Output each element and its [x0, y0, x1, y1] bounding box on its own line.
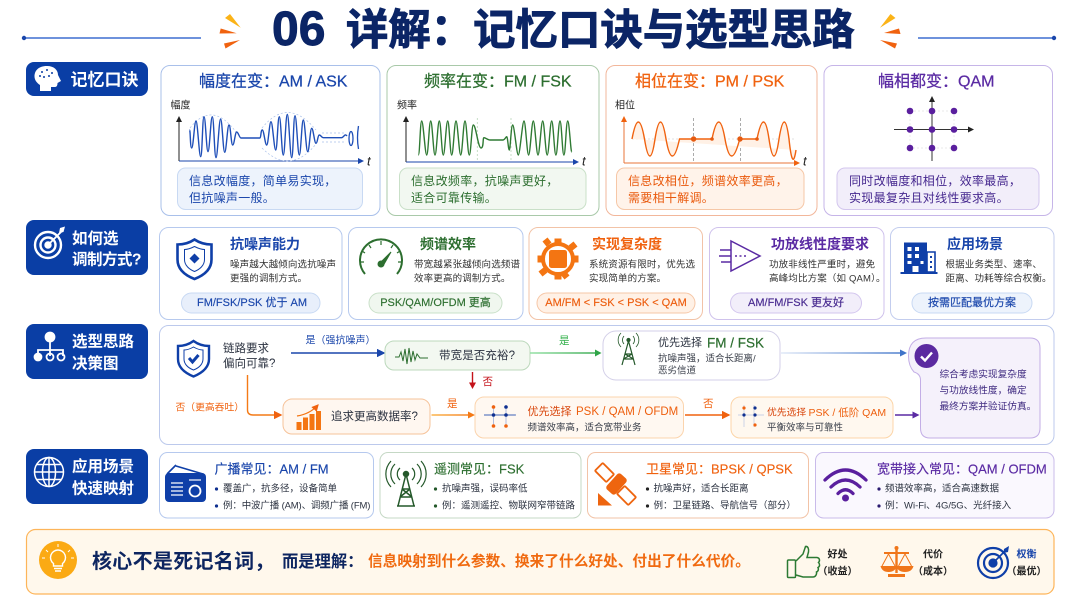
pill: FM/FSK/PSK 优于 AM [197, 296, 307, 309]
box heading: 优先选择 [767, 406, 806, 418]
box heading: 优先选择 [658, 335, 702, 349]
card title: 幅相都变：QAM [878, 72, 994, 90]
chart: amplitude modulation: 幅度 [170, 98, 190, 112]
icon: target [978, 546, 1009, 578]
box heading [658, 335, 764, 350]
pill: PSK/QAM/OFDM 更高 [380, 295, 491, 309]
section tag: 应用场景快速映射 [26, 449, 148, 504]
card title: 相位在变：PM / PSK [635, 72, 785, 90]
bullet list [215, 482, 370, 512]
takeaway text: 信息映射到什么参数、换来了什么好处、付出了什么代价。 [368, 552, 750, 570]
icon: thumbs up [788, 546, 820, 578]
box text: 恶劣信道 [658, 364, 697, 376]
decision text [223, 341, 275, 370]
arrow: no higher throughput [248, 375, 281, 415]
header line right [918, 36, 1056, 40]
box: bandwidth question: 带宽是否充裕? [439, 348, 515, 362]
icon: check [914, 344, 938, 368]
panel: telemetry [380, 452, 581, 518]
pill [730, 293, 862, 313]
title: 详解：记忆口诀与选型思路 [346, 6, 855, 54]
arrow: to final purple [895, 412, 920, 418]
tag text: 如何选 [72, 228, 119, 248]
final text [940, 368, 1036, 412]
card title: 宽带接入常见：QAM / OFDM [877, 462, 1047, 476]
chart: phase modulation [615, 98, 808, 168]
tag text: 快速映射 [72, 480, 134, 498]
takeaway text [92, 549, 750, 573]
info box: 实现最复杂且对线性要求高。 [849, 190, 1009, 205]
card title: 频率在变：FM / FSK [424, 72, 572, 90]
icon: globe [34, 458, 64, 486]
box heading: PSK / 低阶 QAM [808, 406, 886, 419]
cost label [913, 548, 953, 578]
section tag: 选型思路决策图 [26, 324, 148, 379]
pill [912, 293, 1032, 313]
bullet list: 例：卫星链路、导航信号（部分） [654, 500, 796, 512]
bullet list [434, 482, 576, 512]
info box: 需要相干解调。 [628, 191, 714, 205]
label: yes strong noise: 是（强抗噪声） [306, 334, 376, 346]
tag text [72, 456, 134, 498]
info box: 同时改幅度和相位，效率最高， [849, 173, 1021, 188]
arrow: no to low order [685, 414, 729, 416]
icon: right sparks [880, 14, 900, 48]
pill: 按需匹配最优方案 [928, 295, 1016, 309]
body text: 实现简单的方案。 [589, 272, 666, 284]
body text [230, 258, 336, 284]
arrow: to bandwidth [291, 352, 384, 354]
chart: phase modulation: 相位 [615, 98, 635, 112]
pill [369, 293, 502, 313]
box: bandwidth question [385, 341, 530, 370]
icon: tower [386, 461, 426, 506]
pill: AM/FM < FSK < PSK < QAM [545, 297, 687, 309]
panel: 应用场景 [890, 228, 1054, 320]
chart: frequency modulation: 频率 [397, 98, 417, 112]
icon: left sparks [220, 14, 241, 48]
info box: 信息改频率，抗噪声更好， [411, 173, 559, 188]
cost label: （成本） [913, 564, 953, 578]
arrow: to final [781, 350, 907, 356]
info box [400, 168, 586, 210]
panel: decision flow [160, 326, 1054, 444]
icon: buildings [900, 242, 938, 274]
pill [182, 293, 320, 313]
heading: 应用场景 [947, 236, 1003, 252]
icon: scale [880, 546, 914, 577]
tag text: 应用场景 [72, 456, 134, 476]
tradeoff label: （最优） [1006, 564, 1046, 578]
body text: 高峰均比方案（如 QAM）。 [769, 272, 886, 284]
tag text [72, 332, 135, 372]
tag text: 决策图 [72, 354, 119, 372]
panel: satellite [588, 452, 808, 518]
body text [414, 258, 521, 284]
benefit label: 好处 [828, 548, 848, 560]
box text: 频谱效率高，适合宽带业务 [528, 422, 642, 434]
body text: 功放非线性严重时，避免 [769, 258, 876, 270]
box text: 抗噪声强，适合长距离/ [658, 352, 756, 364]
info box: 信息改相位，频谱效率更高， [628, 173, 788, 188]
tradeoff label [1006, 548, 1046, 578]
box heading: 优先选择 [528, 404, 572, 418]
takeaway text: 核心不是死记名词， [92, 549, 275, 573]
card title: 遥测常见：FSK [434, 462, 525, 476]
panel: 实现复杂度 [529, 228, 702, 320]
section tag: 记忆口诀 [26, 62, 148, 96]
chart: QAM constellation [894, 97, 973, 161]
card title: 幅度在变：AM / ASK [199, 72, 348, 90]
tag text: 调制方式? [72, 250, 141, 268]
box heading [767, 406, 886, 419]
chart: amplitude modulation [170, 98, 372, 168]
bullet list: 例：中波广播 (AM)、调频广播 (FM) [223, 500, 370, 512]
info box: 适合可靠传输。 [411, 190, 497, 205]
tag text: 记忆口诀 [70, 70, 138, 90]
icon: shield check [178, 341, 209, 376]
final text: 最终方案并验证仿真。 [940, 400, 1036, 412]
card title: 广播常见：AM / FM [214, 462, 329, 476]
body text: 带宽越紧张越倾向选频谱 [414, 258, 521, 270]
final text: 综合考虑实现复杂度 [940, 368, 1027, 380]
body text [769, 258, 886, 284]
panel: AM / ASK [161, 66, 380, 216]
header line left [22, 36, 201, 40]
benefit label: （收益） [818, 564, 858, 578]
box heading [528, 404, 678, 418]
chart: frequency modulation: t [582, 154, 587, 168]
icon: shield [178, 240, 212, 279]
banner: key takeaway [26, 530, 1054, 594]
box: prefer FM/FSK [603, 331, 780, 380]
icon: gauge [360, 239, 402, 274]
label: no: 否 [703, 398, 714, 410]
box: prefer PSK/low QAM [731, 397, 893, 438]
pill [537, 293, 695, 313]
heading: 抗噪声能力 [230, 236, 300, 252]
cost label: 代价 [923, 548, 943, 560]
info box: 但抗噪声一般。 [189, 190, 275, 205]
heading: 功放线性度要求 [771, 236, 869, 252]
takeaway text: 而是理解： [282, 553, 363, 571]
section tag: 如何选调制方式 [26, 220, 148, 275]
label: yes: 是 [559, 335, 570, 347]
label: no: 否 [482, 376, 494, 388]
icon: radio [165, 465, 206, 502]
panel: broadcast [160, 452, 374, 518]
icon: constellation [484, 405, 516, 428]
panel: broadband [816, 452, 1054, 518]
decision text: 偏向可靠? [223, 356, 275, 370]
pill: AM/FM/FSK 更友好 [748, 295, 844, 309]
body text: 根据业务类型、速率、 [946, 258, 1042, 270]
icon: light bulb [39, 541, 77, 579]
box text: 平衡效率与可靠性 [767, 422, 844, 434]
bullet list: 抗噪声强，误码率低 [442, 482, 528, 494]
body text: 噪声越大越倾向选抗噪声 [230, 258, 336, 270]
bullet list: 抗噪声好，适合长距离 [654, 482, 749, 494]
benefit label [818, 548, 858, 578]
icon: brain head [34, 66, 61, 91]
tag text: 选型思路 [72, 332, 135, 350]
chart: frequency modulation [397, 98, 587, 168]
box heading: FM / FSK [707, 336, 764, 350]
info box [837, 168, 1039, 210]
icon: tower [618, 333, 639, 365]
tradeoff label: 权衡 [1016, 548, 1036, 560]
info box: 信息改幅度，简单易实现， [189, 173, 337, 188]
box: data rate question [283, 399, 430, 434]
body text [946, 258, 1052, 284]
box heading: PSK / QAM / OFDM [576, 406, 678, 418]
chart: phase modulation: t [803, 154, 808, 168]
panel: 频谱效率 [348, 228, 523, 320]
label: no higher throughput: 否（更高吞吐） [176, 400, 244, 414]
box: final decision [908, 338, 1040, 438]
bullet list: 频谱效率高，适合高速数据 [885, 482, 1000, 494]
arrow: yes to PSK [432, 412, 475, 418]
heading: 实现复杂度 [592, 236, 662, 252]
title: 06 [272, 3, 325, 56]
bullet list: 覆盖广，抗多径，设备简单 [223, 482, 338, 494]
box: prefer PSK/QAM/OFDM [475, 397, 684, 438]
body text: 系统资源有限时，优先选 [589, 258, 696, 270]
body text: 距离、功耗等综合权衡。 [946, 272, 1052, 284]
bullet list [877, 482, 1012, 512]
decision text: 链路要求 [223, 341, 269, 355]
info box [178, 168, 362, 210]
info box [616, 168, 804, 210]
bullet list [646, 482, 796, 512]
body text [589, 258, 696, 284]
icon: decision tree [34, 332, 64, 360]
chart: amplitude modulation: t [367, 154, 372, 168]
panel: 抗噪声能力 [160, 228, 342, 320]
label: yes: 是 [447, 398, 458, 410]
heading: 频谱效率 [420, 236, 476, 252]
arrow: no down [469, 372, 476, 389]
bullet list: 例：遥测遥控、物联网窄带链路 [442, 500, 576, 512]
panel: QAM [824, 66, 1052, 216]
icon: target [35, 226, 65, 258]
final text: 与功放线性度，确定 [940, 384, 1027, 396]
icon: wifi [825, 470, 866, 502]
icon: bar chart [296, 405, 321, 430]
box text: 追求更高数据率? [331, 409, 418, 423]
panel: FM / FSK [387, 66, 599, 216]
body text: 效率更高的调制方式。 [414, 272, 511, 284]
icon: constellation [738, 405, 764, 427]
bullet list: 例：Wi-Fi、4G/5G、光纤接入 [885, 500, 1012, 512]
card title: 卫星常见：BPSK / QPSK [646, 462, 793, 476]
icon: satellite [595, 463, 636, 506]
box text [658, 352, 756, 376]
body text: 更强的调制方式。 [230, 272, 307, 284]
icon: amplifier [719, 241, 760, 271]
panel: 功放线性度要求 [710, 228, 886, 320]
tag text [72, 228, 141, 268]
arrow: yes to FM/FSK [530, 350, 602, 356]
icon: gear chip [538, 238, 578, 280]
panel: PM / PSK [606, 66, 817, 216]
